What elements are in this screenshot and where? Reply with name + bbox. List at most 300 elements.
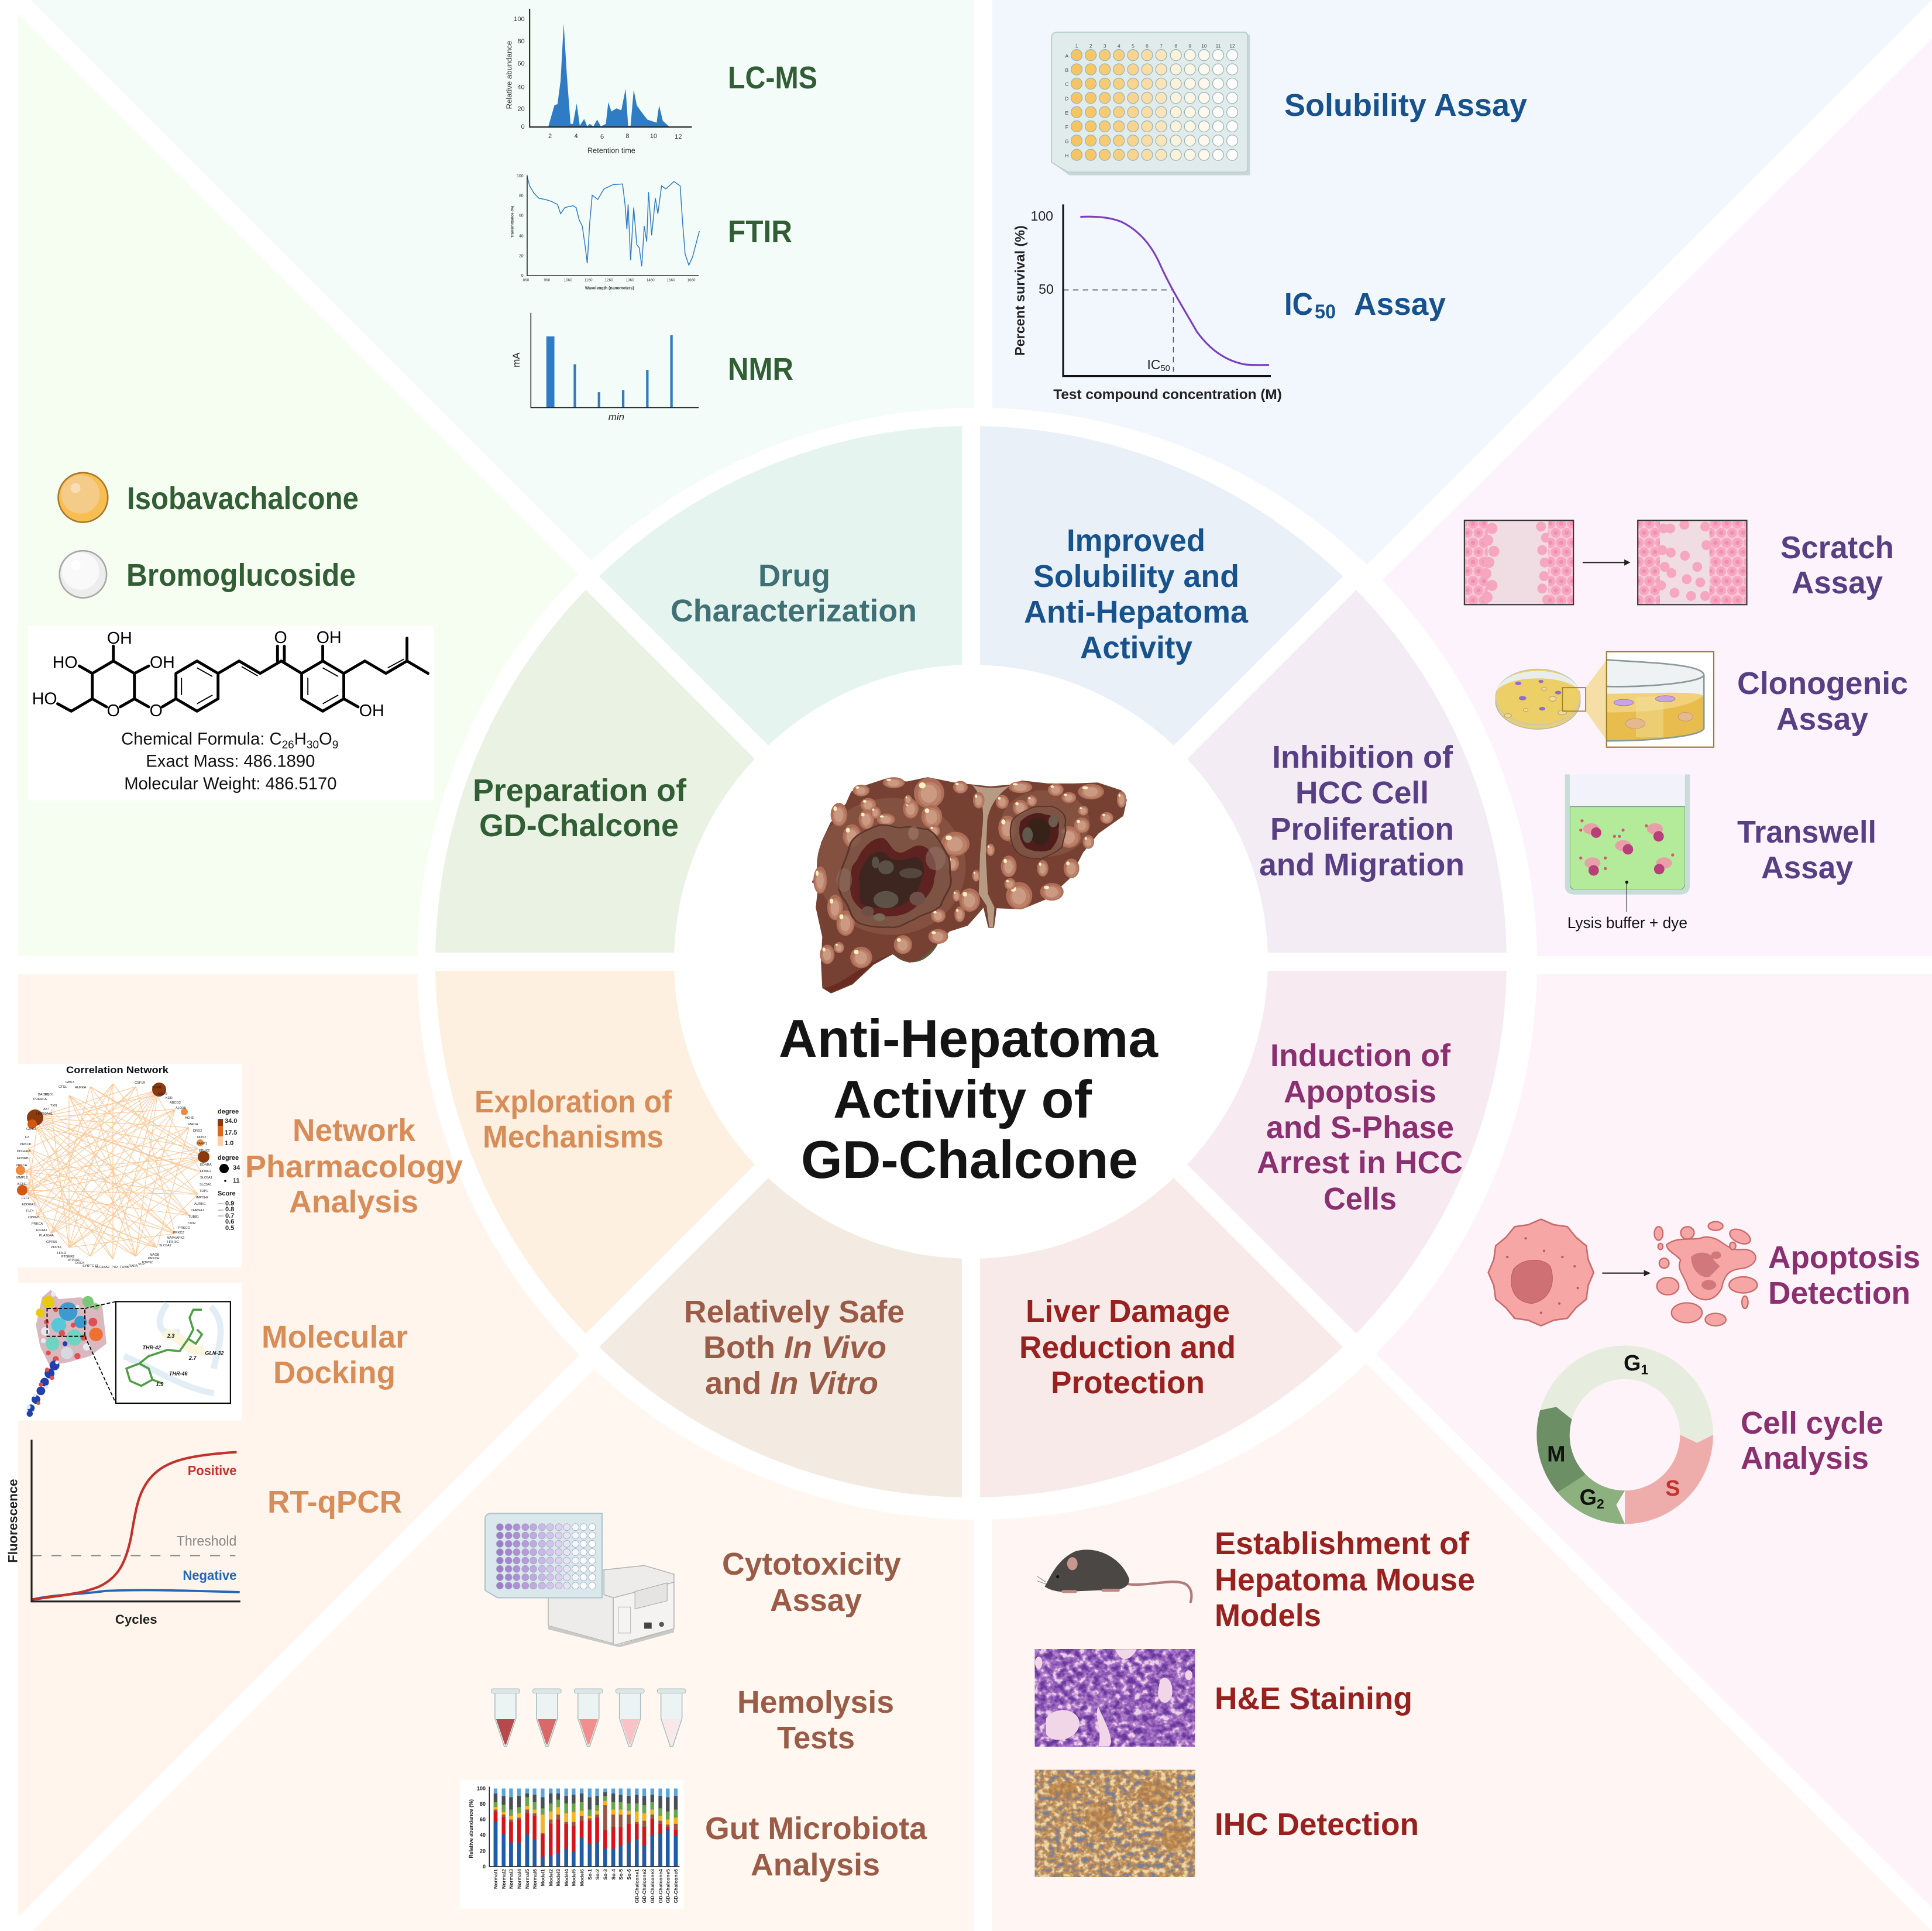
panel: correlation network: 34.0 (225, 1118, 237, 1125)
label: Clonogenic Assay (1737, 666, 1908, 737)
panel: liver protection background (992, 989, 1932, 1931)
label: IC50 Assay: Assay (1354, 287, 1446, 322)
chart: LC-MS chromatogram: Retention time (587, 146, 635, 154)
sector: Drug Characterization (599, 426, 962, 745)
label: Transwell Assay: Transwell (1737, 815, 1876, 850)
chart: FTIR spectrum: 80 (519, 194, 524, 198)
chart: gut microbiota stacked bars: Normal1 (493, 1869, 499, 1889)
icon: clonogenic dish (1496, 652, 1714, 747)
sector: Inhibition of Proliferation: Inhibition of (1272, 740, 1453, 775)
label: Apoptosis Detection: Apoptosis (1768, 1240, 1920, 1275)
label: Network Pharmacology Analysis: Pharmacology (245, 1149, 463, 1184)
panel: correlation network: PRKCH (148, 1257, 160, 1260)
sector: Preparation of GD-Chalcone: GD-Chalcone (479, 808, 679, 843)
sector: Induction of Apoptosis: Apoptosis (1284, 1074, 1436, 1109)
sector: Liver Damage Reduction: Reduction and (1019, 1330, 1236, 1365)
icon: solubility well plate: G (1065, 139, 1069, 145)
panel: GD-Chalcone chemical structure: OH (317, 628, 342, 647)
chart: cell cycle donut: G (1624, 1351, 1641, 1376)
chart: FTIR spectrum: Wavelength (nanometers) (585, 286, 634, 290)
chart: LC-MS chromatogram: 4 (574, 133, 578, 140)
chart: gut microbiota stacked bars: Model6 (579, 1869, 585, 1886)
panel: correlation network: MMP12 (16, 1176, 27, 1180)
panel: correlation network: IMPDH2 (196, 1196, 208, 1200)
chart: RT-qPCR amplification: Fluorescence (6, 1479, 20, 1563)
sector: Relatively Safe (599, 1178, 962, 1497)
panel: correlation network: EPHX2 (199, 1149, 209, 1153)
panel: GD-Chalcone chemical structure: HO (53, 653, 78, 672)
panel: correlation network: PARP1 (197, 1142, 207, 1146)
label: Cell cycle Analysis (1741, 1406, 1883, 1476)
sector: Induction of Apoptosis: Cells (1323, 1181, 1397, 1217)
icon: solubility well plate: B (1065, 67, 1069, 73)
sector: Induction of Apoptosis: Arrest in HCC (1257, 1145, 1463, 1180)
label: Scratch Assay (1780, 530, 1894, 600)
panel: correlation network: PRKACA (33, 1098, 47, 1101)
label: Cell cycle Analysis: Analysis (1741, 1441, 1869, 1476)
panel: correlation network: EDNRA (200, 1163, 212, 1167)
chart: gut microbiota stacked bars: Normal3 (508, 1869, 514, 1889)
chart: FTIR spectrum: 1560 (667, 279, 675, 283)
panel: correlation network: degree (218, 1108, 239, 1115)
panel: correlation network: FLT1 (22, 1197, 29, 1200)
label: IC50 Assay (1284, 287, 1446, 323)
image: H&E stained tissue (1035, 1649, 1195, 1747)
panel: GD-Chalcone chemical structure: Molecular Weight: 486.5170 (124, 775, 336, 793)
label: Gut Microbiota Analysis: Analysis (751, 1847, 880, 1882)
icon: solubility well plate: 11 (1216, 43, 1221, 49)
sector: Liver Damage Reduction: Liver Damage (1026, 1294, 1230, 1329)
label: RT-qPCR: RT-qPCR (267, 1485, 402, 1520)
sector: Preparation of GD-Chalcone: Preparation of (473, 773, 687, 808)
panel: molecular docking: THR-42 (143, 1345, 161, 1351)
panel: correlation network: EDNRB (17, 1157, 29, 1160)
icon: solubility well plate: C (1065, 81, 1068, 87)
label: Gut Microbiota Analysis (705, 1811, 927, 1882)
sector: Liver Damage Reduction: Protection (1051, 1365, 1205, 1400)
panel: correlation network: F2 (25, 1136, 29, 1139)
sector: Exploration of Mechanisms: Mechanisms (483, 1119, 664, 1155)
sector: Exploration of Mechanisms: Exploration of (475, 1084, 672, 1119)
panel: correlation network: degree (218, 1155, 239, 1162)
label: Hemolysis Tests: Tests (777, 1720, 855, 1755)
label: Isobavachalcone: Isobavachalcone (127, 481, 359, 516)
label: Network Pharmacology Analysis: Network (293, 1113, 416, 1148)
chart: LC-MS chromatogram: 8 (625, 133, 630, 140)
panel: molecular docking: 2.3 (167, 1333, 174, 1339)
label: Establishment of Hepatoma Mouse Models (1215, 1526, 1475, 1633)
chart: IC50 dose response curve: IC (1147, 357, 1161, 372)
chart: RT-qPCR amplification: Threshold (177, 1534, 236, 1549)
chart: FTIR spectrum: 1360 (626, 279, 634, 283)
label: Bromoglucoside: Bromoglucoside (126, 558, 356, 593)
icon: solubility well plate: E (1065, 110, 1069, 116)
chart: gut microbiota stacked bars: Normal4 (516, 1869, 522, 1889)
panel: correlation network: SLC5A1 (200, 1183, 212, 1187)
label: IC50 Assay: IC (1284, 287, 1313, 322)
panel: correlation network: PRKCG (178, 1226, 190, 1230)
panel: correlation network: AURKA (75, 1086, 87, 1090)
image: IHC stained tissue (1035, 1770, 1195, 1877)
icon: hemolysis tubes (491, 1689, 686, 1747)
label: Molecular Docking: Molecular (262, 1320, 408, 1355)
chart: LC-MS chromatogram: 60 (517, 60, 525, 67)
chart: FTIR spectrum: 60 (519, 214, 524, 218)
panel: correlation network: 0.5 (225, 1225, 234, 1232)
icon: mouse (1037, 1549, 1191, 1602)
panel: correlation network: Correlation Network (66, 1064, 169, 1076)
sector: Inhibition of Proliferation: and Migration (1259, 847, 1465, 882)
panel: GD-Chalcone chemical structure (28, 626, 434, 800)
panel: correlation network: PTGER2 (61, 1255, 74, 1259)
icon: solubility well plate: 7 (1160, 43, 1163, 49)
chart: FTIR spectrum: 1260 (605, 279, 613, 283)
label: Solubility Assay: Solubility Assay (1284, 88, 1527, 123)
panel: correlation network: PLA2G4A (39, 1234, 54, 1238)
panel: correlation network: MAOB (150, 1253, 160, 1257)
panel: correlation network: 0.9 (225, 1200, 234, 1207)
chart: RT-qPCR amplification: Positive (188, 1463, 236, 1478)
chart: IC50 dose response curve: Test compound concentration (M) (1053, 387, 1282, 403)
chart: LC-MS chromatogram: 6 (600, 133, 604, 140)
panel: molecular docking: 1.9 (156, 1381, 163, 1387)
panel: correlation network: 1.0 (225, 1140, 233, 1147)
chart: FTIR spectrum: 40 (519, 234, 524, 238)
panel: correlation network: NOS2 (197, 1136, 206, 1139)
chart: gut microbiota stacked bars: GD-Chalcone6 (673, 1869, 679, 1903)
panel: GD-Chalcone chemical structure: 9 (332, 739, 338, 751)
chart: IC50 dose response curve: 100 (1031, 208, 1053, 224)
panel: correlation network: DRD4 (75, 1262, 84, 1265)
icon: apoptosis cell arrow and fragments (1488, 1219, 1757, 1326)
icon: cytotoxicity plate and reader (485, 1513, 674, 1647)
panel: correlation network: SYK (82, 1265, 89, 1268)
chart: gut microbiota stacked bars: 0 (483, 1864, 486, 1870)
panel: GD-Chalcone chemical structure: HO (32, 690, 57, 709)
panel: GD-Chalcone chemical structure: OH (359, 702, 384, 720)
panel: correlation network: 34 (233, 1164, 240, 1171)
label: Network Pharmacology Analysis (245, 1113, 463, 1219)
label: FTIR: FTIR (728, 214, 792, 249)
white ring around the wheel (417, 408, 1537, 1520)
chart: LC-MS chromatogram: 40 (517, 84, 525, 91)
label: Network Pharmacology Analysis: Analysis (289, 1184, 418, 1219)
icon: solubility well plate: 4 (1118, 43, 1120, 49)
label: IC50 Assay: 50 (1315, 301, 1336, 323)
sector: Inhibition of Proliferation (1187, 590, 1507, 953)
panel: correlation network: TUBB1 (188, 1215, 199, 1219)
chart: LC-MS chromatogram: 100 (514, 16, 525, 23)
chart: FTIR spectrum: 860 (523, 279, 530, 283)
panel: correlation network: RARA (129, 1265, 138, 1268)
panel: correlation network: Score (218, 1190, 236, 1197)
panel: correlation network: ATP1A1 (68, 1259, 80, 1262)
chart: LC-MS chromatogram: 20 (517, 106, 525, 113)
icon: solubility well plate: H (1065, 153, 1068, 159)
label: Scratch Assay: Assay (1792, 565, 1883, 600)
chart: gut microbiota stacked bars: GD-Chalcone1 (634, 1869, 640, 1903)
chart: gut microbiota stacked bars: Model2 (548, 1869, 554, 1886)
icon: solubility well plate: F (1065, 124, 1068, 130)
panel: correlation network: BCHE (18, 1183, 27, 1186)
chart: gut microbiota stacked bars: So-5 (618, 1869, 624, 1880)
sector: Drug Characterization: Drug (758, 558, 830, 593)
label: Transwell Assay (1737, 815, 1876, 885)
sector: Exploration of Mechanisms (435, 971, 755, 1334)
chart: gut microbiota stacked bars: So-6 (626, 1869, 632, 1880)
icon: solubility well plate: 3 (1103, 43, 1106, 49)
panel: apoptosis background (995, 974, 1932, 1908)
chart: NMR bars: mA (511, 352, 522, 367)
chart: FTIR spectrum: 1060 (564, 279, 572, 283)
panel: correlation network: OPRM1 (28, 1216, 40, 1219)
chart: gut microbiota stacked bars: Relative abundance (%) (468, 1799, 474, 1858)
label: Scratch Assay: Scratch (1780, 530, 1894, 565)
panel: correlation network (16, 1064, 242, 1269)
label: Apoptosis Detection (1768, 1240, 1920, 1311)
panel: correlation network: MAPKAPK2 (167, 1236, 184, 1240)
panel: correlation network: HRH2 (57, 1252, 66, 1255)
chart: cell cycle donut: M (1547, 1442, 1566, 1467)
chart: IC50 dose response curve: 50 (1039, 281, 1054, 297)
label: Establishment of Hepatoma Mouse Models: Establishment of (1215, 1526, 1470, 1561)
panel: correlation network: PRKCD (20, 1143, 32, 1146)
chart: FTIR spectrum: 1660 (687, 279, 696, 283)
icon: scratch assay (1465, 520, 1747, 604)
panel: proliferation background (1001, 39, 1932, 956)
chart: gut microbiota stacked bars: 100 (477, 1786, 486, 1792)
panel: correlation network: EGFR (152, 1086, 161, 1090)
icon: solubility well plate (1051, 32, 1250, 176)
chart: cell cycle donut: 2 (1597, 1496, 1604, 1511)
icon: solubility well plate: 12 (1229, 43, 1235, 49)
chart: IC50 dose response curve: Percent survival (%) (1012, 225, 1027, 356)
icon: transwell beaker: Lysis buffer + dye (1567, 914, 1687, 932)
chart: IC50 dose response curve: 50 (1161, 364, 1170, 373)
chart: gut microbiota stacked bars: Model5 (571, 1869, 577, 1886)
panel: correlation network: CHRNA7 (191, 1209, 204, 1212)
sector: Improved Solubility: Anti-Hepatoma (1024, 595, 1249, 630)
icon: orange sphere (59, 473, 108, 522)
chart: gut microbiota stacked bars: Normal5 (524, 1869, 530, 1889)
panel: correlation network: TXN (50, 1104, 57, 1108)
panel: correlation network: MMP2 (158, 1092, 167, 1096)
icon: solubility well plate: 1 (1075, 43, 1078, 49)
chart: IC50 dose response curve (1012, 204, 1282, 403)
panel: correlation network: GRIK3 (26, 1128, 36, 1131)
panel: GD-Chalcone chemical structure: OH (150, 653, 175, 672)
panel: correlation network: ABCG2 (170, 1101, 181, 1105)
panel: preparation background (18, 13, 948, 956)
panel: correlation network: BACE1 (38, 1093, 49, 1097)
panel: correlation network: EIF4A1 (36, 1229, 47, 1232)
icon: solubility well plate: 10 (1201, 43, 1207, 49)
panel: correlation network: HSP90AA1 (36, 1112, 53, 1116)
icon: white sphere (60, 551, 106, 598)
panel: correlation network: PRKCA (16, 1164, 27, 1167)
panel: GD-Chalcone chemical structure: O (107, 702, 120, 720)
label: Establishment of Hepatoma Mouse Models: Hepatoma Mouse (1215, 1562, 1475, 1597)
chart: FTIR spectrum: 960 (544, 279, 551, 283)
panel: molecular docking: 2.7 (188, 1355, 197, 1361)
panel: correlation network: KDR (166, 1097, 173, 1100)
title: Activity of (833, 1070, 1092, 1129)
sector: Improved Solubility (980, 426, 1343, 745)
label: Cytotoxicity Assay: Assay (770, 1583, 862, 1618)
chart: gut microbiota stacked bars: GD-Chalcone3 (649, 1869, 655, 1903)
chart: gut microbiota stacked bars: 40 (480, 1832, 486, 1838)
panel: GD-Chalcone chemical structure: H (294, 730, 307, 749)
panel: GD-Chalcone chemical structure: O (319, 730, 332, 749)
panel: correlation network: DRD2 (193, 1129, 202, 1133)
sector: Inhibition of Proliferation: HCC Cell (1295, 775, 1429, 810)
label: H&E Staining: H&E Staining (1215, 1681, 1412, 1716)
chart: RT-qPCR amplification (6, 1439, 240, 1627)
icon: solubility well plate: A (1065, 53, 1069, 59)
panel: correlation network: ALOX5 (176, 1107, 186, 1110)
chart: FTIR spectrum: Transmittance (%) (511, 206, 515, 238)
chart: gut microbiota stacked bars: So-4 (610, 1869, 616, 1880)
chart: cell cycle donut: G (1580, 1485, 1597, 1510)
panel: correlation network: CSF1R (135, 1081, 145, 1085)
panel: GD-Chalcone chemical structure: O (150, 702, 163, 720)
panel: correlation network: 0.8 (225, 1206, 234, 1213)
panel: correlation network: PRKCZ (173, 1231, 185, 1235)
panel: molecular docking: GLN-32 (205, 1350, 224, 1356)
icon: diseased liver (813, 777, 1126, 992)
chart: NMR bars (511, 313, 699, 422)
panel: correlation network: HRH1G (167, 1241, 179, 1244)
chart: gut microbiota stacked bars: GD-Chalcone5 (665, 1869, 671, 1903)
label: Apoptosis Detection: Detection (1768, 1276, 1910, 1311)
icon: solubility well plate: 9 (1188, 43, 1191, 49)
title (779, 1009, 1158, 1190)
title: GD-Chalcone (801, 1131, 1138, 1190)
panel: correlation network: TUBB (120, 1266, 129, 1269)
chart: gut microbiota stacked bars: So-3 (603, 1869, 609, 1880)
chart: gut microbiota stacked bars: Model1 (540, 1869, 546, 1886)
icon: solubility well plate: 2 (1089, 43, 1092, 49)
chart: cell cycle donut (1536, 1346, 1713, 1524)
icon: solubility well plate: 5 (1132, 43, 1135, 49)
sector: Induction of Apoptosis (1187, 971, 1507, 1334)
chart: RT-qPCR amplification: Negative (183, 1568, 236, 1583)
icon: solubility well plate: 8 (1174, 43, 1177, 49)
sector: Improved Solubility: Solubility and (1033, 559, 1239, 594)
label: IHC Detection: IHC Detection (1215, 1807, 1419, 1842)
panel: correlation network: PTGS1 (88, 1265, 98, 1268)
chart: LC-MS chromatogram: 80 (517, 38, 525, 45)
label: Establishment of Hepatoma Mouse Models: Models (1215, 1598, 1321, 1633)
panel: safety background (32, 989, 974, 1931)
panel: correlation network: TXN2 (187, 1222, 195, 1225)
label: Molecular Docking: Docking (273, 1355, 396, 1390)
chart: gut microbiota stacked bars: Normal6 (532, 1869, 538, 1889)
panel: correlation network: ADORA1 (22, 1203, 35, 1207)
chart: FTIR spectrum: 0 (521, 274, 524, 278)
sector: Relatively Safe: and In Vitro (705, 1366, 878, 1401)
chart: LC-MS chromatogram: 12 (675, 133, 682, 140)
label: LC-MS: LC-MS (728, 60, 817, 95)
panel: GD-Chalcone chemical structure: Chemical Formula: C (121, 730, 282, 749)
chart: cell cycle donut: S (1665, 1476, 1680, 1501)
sector: Liver Damage Reduction (980, 1178, 1343, 1497)
panel: correlation network: SLC18A2 (95, 1266, 109, 1269)
sector: Relatively Safe: Both In Vivo (703, 1330, 886, 1365)
sector: Drug Characterization: Characterization (671, 593, 917, 628)
panel: correlation network: MAOA (188, 1123, 198, 1126)
panel: correlation network: ACHE (185, 1116, 194, 1120)
panel: GD-Chalcone chemical structure: 30 (307, 739, 319, 751)
chart: NMR bars: min (609, 411, 624, 422)
panel: correlation network: 0.7 (225, 1212, 234, 1219)
panel: correlation network: GBK3 (66, 1081, 74, 1084)
chart: FTIR spectrum: 1160 (585, 279, 593, 283)
chart: gut microbiota stacked bars: So-1 (587, 1869, 593, 1880)
label: Hemolysis Tests: Hemolysis (737, 1685, 894, 1720)
panel: correlation network: SLC6A1 (200, 1176, 212, 1180)
chart: gut microbiota stacked bars: GD-Chalcone4 (658, 1869, 664, 1903)
chart: LC-MS chromatogram: 0 (521, 123, 525, 130)
panel: correlation network: NQO1 (44, 1093, 54, 1097)
panel: correlation network: FLT4 (26, 1210, 34, 1213)
label: Cell cycle Analysis: Cell cycle (1741, 1406, 1883, 1441)
chart: LC-MS chromatogram: Relative abundance (504, 41, 513, 109)
panel: solubility background (992, 0, 1932, 939)
panel: GD-Chalcone chemical structure: O (274, 628, 287, 647)
panel: GD-Chalcone chemical structure: Exact Mass: 486.1890 (146, 753, 315, 771)
chart: gut microbiota stacked bars (460, 1781, 684, 1909)
panel: correlation network: TDP1 (200, 1190, 208, 1193)
label: Cytotoxicity Assay (722, 1547, 901, 1618)
chart: FTIR spectrum: 100 (517, 174, 524, 178)
sector: Induction of Apoptosis: and S-Phase (1266, 1110, 1454, 1145)
panel: correlation network: TYR (111, 1266, 118, 1269)
chart: gut microbiota stacked bars: 80 (480, 1801, 486, 1807)
panel: correlation network: HDAC2 (200, 1170, 211, 1173)
panel: mechanisms background (18, 974, 960, 1917)
chart: gut microbiota stacked bars: Model3 (555, 1869, 561, 1886)
chart: FTIR spectrum: 1460 (647, 279, 655, 283)
label: Clonogenic Assay: Assay (1776, 702, 1868, 737)
panel: correlation network: VCP (138, 1263, 145, 1266)
panel: molecular docking: THR-46 (169, 1370, 188, 1376)
panel: correlation network: SLC6A2 (159, 1244, 171, 1248)
panel: characterization background (31, 0, 974, 943)
chart: RT-qPCR amplification: Cycles (115, 1612, 157, 1627)
label: Clonogenic Assay: Clonogenic (1737, 666, 1908, 701)
sector: Induction of Apoptosis: Induction of (1270, 1038, 1451, 1073)
panel: correlation network: GPR55 (46, 1241, 57, 1244)
title: Anti-Hepatoma (779, 1009, 1158, 1068)
panel: correlation network: 17.5 (225, 1129, 237, 1136)
panel: molecular docking (18, 1283, 242, 1421)
label: Transwell Assay: Assay (1761, 850, 1853, 885)
chart: cell cycle donut: 1 (1641, 1362, 1648, 1377)
icon: solubility well plate: 6 (1146, 43, 1149, 49)
sector: Improved Solubility: Improved (1067, 523, 1205, 558)
panel: correlation network: PDPK1 (51, 1246, 61, 1249)
panel: correlation network: AKT (43, 1108, 50, 1111)
chart: LC-MS chromatogram: 10 (650, 133, 657, 140)
panel: GD-Chalcone chemical structure: 26 (282, 739, 294, 751)
chart: gut microbiota stacked bars: Model4 (563, 1869, 569, 1886)
label: Cytotoxicity Assay: Cytotoxicity (722, 1547, 901, 1582)
panel: correlation network: 0.6 (225, 1218, 234, 1225)
chart: LC-MS chromatogram (504, 9, 692, 154)
chart: gut microbiota stacked bars: GD-Chalcone2 (641, 1869, 647, 1903)
panel: correlation network: PTPN2 (142, 1261, 153, 1265)
